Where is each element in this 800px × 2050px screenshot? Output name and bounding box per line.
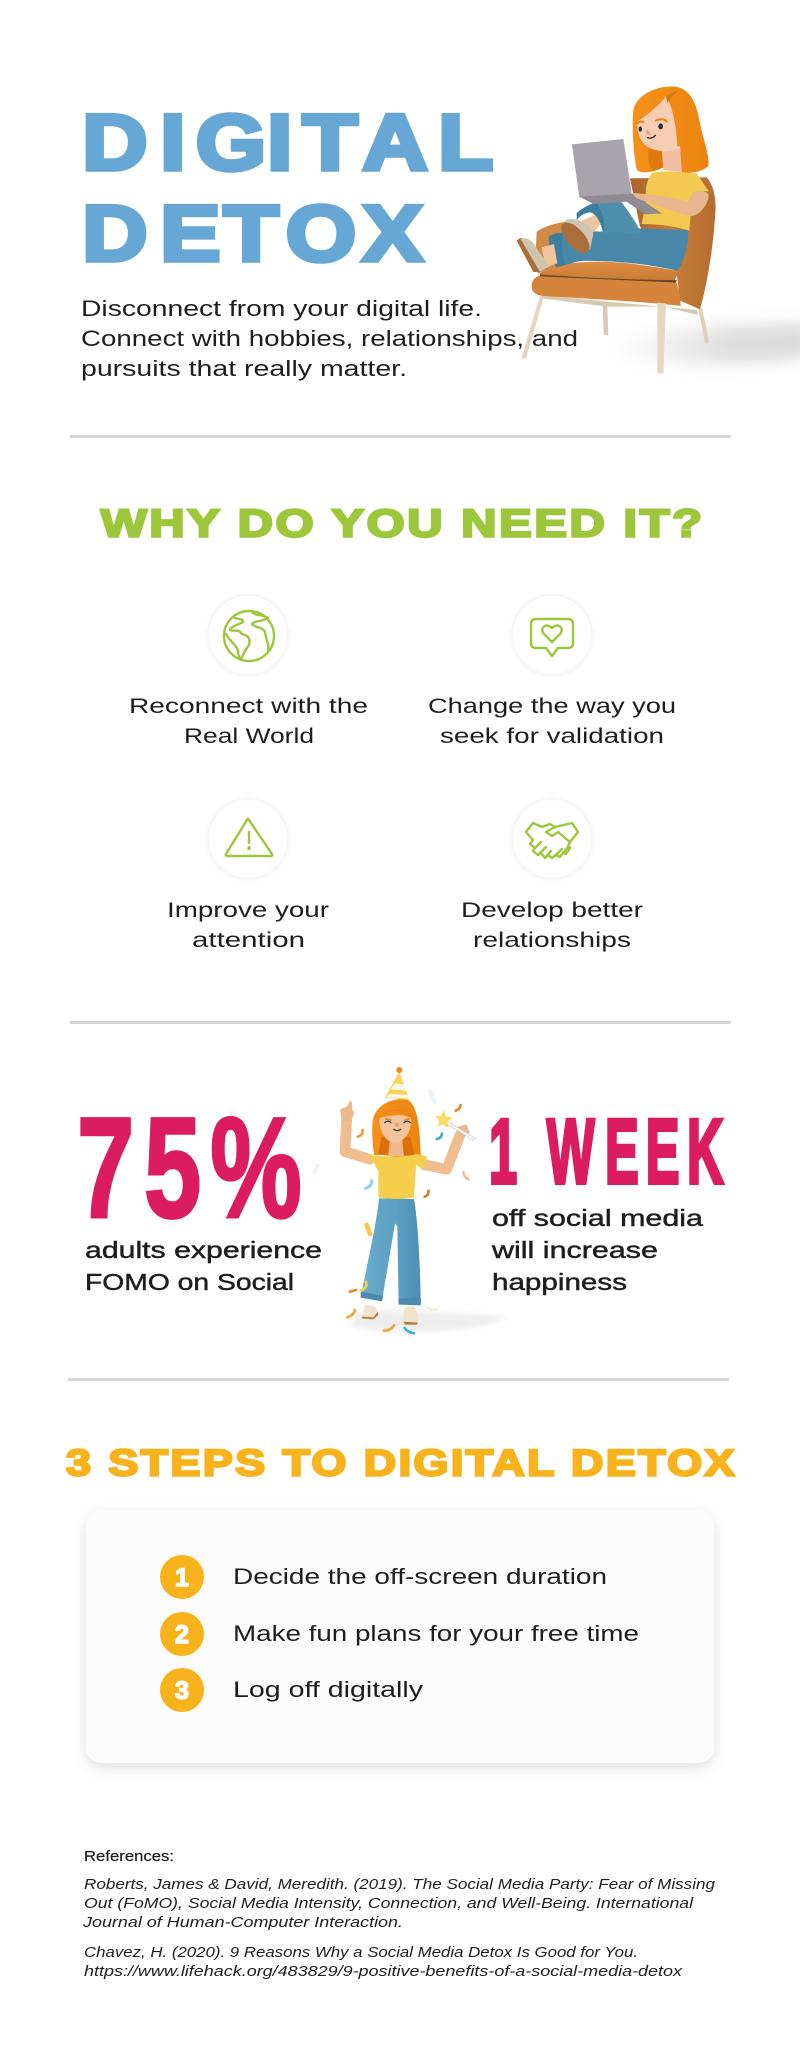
floor shadow [353,1310,510,1332]
step 2: 2 [175,1621,189,1649]
face [637,96,677,151]
benefit: improve your attention [167,800,329,952]
label: Reconnect with the [129,694,368,718]
stat caption: FOMO on Social [85,1269,294,1295]
title: DETOX [82,189,423,277]
floor shadow [607,323,800,364]
label: seek for validation [440,724,664,748]
face [379,1115,411,1143]
neck [662,148,682,172]
label: Real World [184,724,314,748]
references [82,1849,715,1980]
references: Chavez, H. (2020). 9 Reasons Why a Social Media Detox Is Good for You. [84,1945,638,1961]
subtitle text [81,296,578,381]
benefit: change the way you seek for validation [428,596,676,748]
references: Out (FoMO), Social Media Intensity, Connection, and Well-Being. International [84,1896,694,1912]
step 1: Decide the off-screen duration [233,1564,607,1589]
shirt [642,171,709,231]
stat caption: happiness [492,1269,627,1295]
footrest arm [536,222,580,272]
seat base [532,275,681,306]
icon: heart speech bubble [513,596,591,674]
neck [388,1138,404,1156]
references: References: [84,1849,174,1865]
stat caption: will increase [491,1237,658,1263]
references: Roberts, James & David, Meredith. (2019). The Social Media Party: Fear of Missing [84,1877,715,1893]
step 2 [160,1612,639,1656]
label: attention [192,928,305,952]
step 2: Make fun plans for your free time [233,1621,639,1646]
subtitle text: pursuits that really matter. [81,356,407,381]
laptop [572,139,632,197]
right arm [425,1135,460,1169]
illustration: woman on armchair with laptop [517,86,800,373]
label [167,898,329,952]
label: Change the way you [428,694,676,718]
stat caption: off social media [492,1205,703,1231]
party hat [385,1067,409,1100]
heading: why do you need it: WHY DO YOU NEED IT? [101,502,702,545]
shoe lower [519,238,549,272]
front leg [657,303,666,373]
left arm [345,1120,370,1159]
references: https://www.lifehack.org/483829/9-positive-benefits-of-a-social-media-detox [84,1964,683,1980]
icon: globe [209,596,287,674]
cushion [539,262,679,280]
icon: warning triangle [209,800,287,878]
icon: handshake [513,800,591,878]
stat: 1 week [489,1100,723,1295]
heading: 3 steps: 3 STEPS TO DIGITAL DETOX [66,1442,735,1484]
step 1: 1 [175,1564,189,1592]
benefit: reconnect with the real world [129,596,368,748]
label: Improve your [167,898,329,922]
jeans [549,228,688,271]
chair back [630,177,716,309]
arm [632,191,709,216]
title: DIGITAL [82,98,493,186]
hair back [372,1099,421,1158]
step 1 [160,1555,607,1599]
step 3: 3 [175,1677,189,1705]
shoes [362,1305,378,1319]
label [461,898,643,952]
hair back [633,86,709,173]
wand [448,1123,473,1139]
confetti [315,1092,469,1333]
title [82,98,493,277]
raised leg [577,199,642,234]
subtitle text: Connect with hobbies, relationships, and [81,326,578,351]
jeans [361,1198,421,1304]
stat caption [85,1237,322,1295]
shirt [367,1154,427,1199]
stat caption [491,1205,703,1295]
benefit: develop better relationships [461,800,643,952]
stat caption: adults experience [85,1237,322,1263]
subtitle text: Disconnect from your digital life. [81,296,482,321]
label [428,694,676,748]
label [129,694,368,748]
step 3: Log off digitally [233,1677,423,1702]
stat: 75 percent: 75% [77,1088,302,1248]
panel: steps card [86,1510,714,1763]
stat: 1 week: 1 WEEK [489,1100,723,1203]
label: Develop better [461,898,643,922]
references: Journal of Human-Computer Interaction. [82,1915,403,1931]
illustration: celebrating woman with party hat [315,1067,510,1333]
step 3 [160,1668,423,1712]
label: relationships [473,928,631,952]
